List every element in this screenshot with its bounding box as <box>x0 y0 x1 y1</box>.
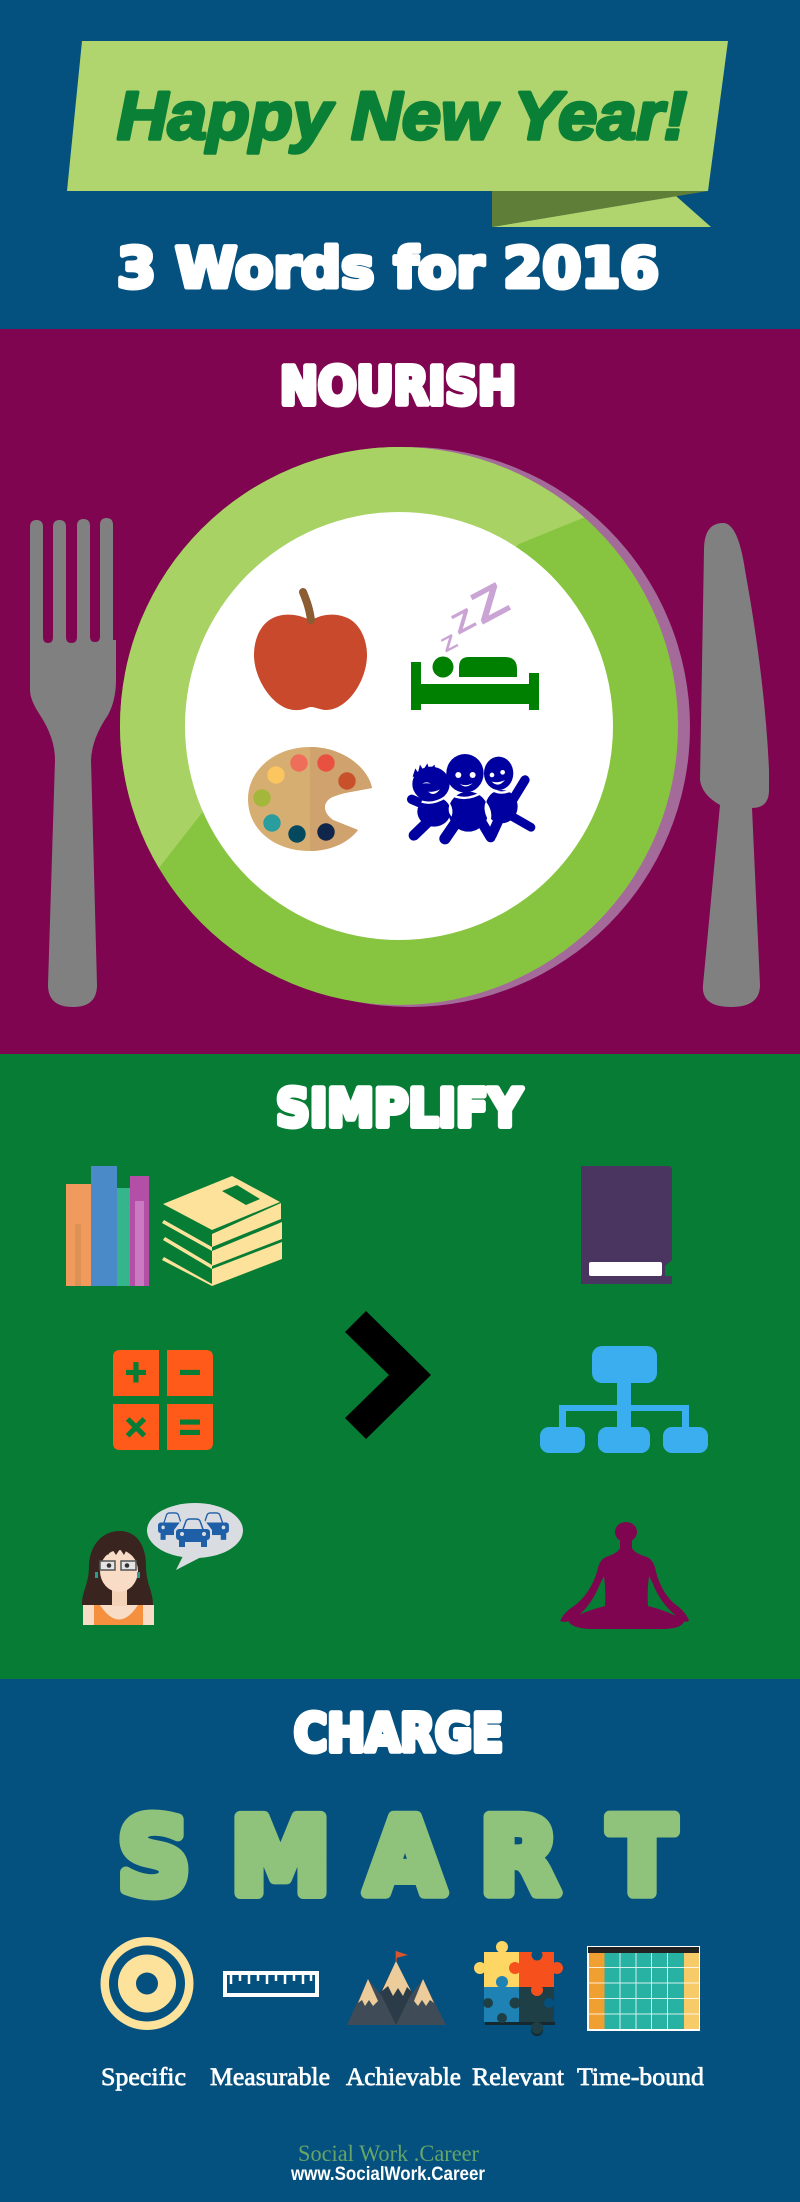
icon: puzzle <box>474 1941 563 2036</box>
smart acronym <box>118 1796 675 1918</box>
icon: sleeping in bed: Z <box>437 630 461 657</box>
icon: apple <box>254 592 367 710</box>
icon: org chart <box>540 1346 708 1453</box>
smart acronym: A <box>366 1796 444 1918</box>
label: specific: Specific <box>101 2064 186 2091</box>
icon: woman thinking about traffic <box>82 1503 243 1625</box>
icon: calendar <box>587 1946 700 2031</box>
panel: charge <box>0 1679 800 2202</box>
speech bubble with cars <box>147 1503 243 1570</box>
label: achievable: Achievable <box>346 2064 461 2091</box>
footer brand: Social Work .Career <box>298 2141 479 2166</box>
icon: stack of books <box>162 1176 282 1286</box>
icon: calculator: × <box>125 1407 147 1449</box>
icon: book shelf <box>66 1166 149 1286</box>
icon: sleeping in bed: Z <box>462 573 518 635</box>
heading: charge: CHARGE <box>294 1704 503 1764</box>
panel: header <box>0 0 800 329</box>
icon: paint palette <box>248 747 372 851</box>
arrow: greater-than chevron <box>345 1311 431 1439</box>
icon: single book <box>581 1166 672 1284</box>
label: time-bound: Time-bound <box>577 2064 705 2091</box>
plate <box>100 430 690 1007</box>
icon: target <box>100 1937 194 2030</box>
icon: fork <box>30 518 116 1007</box>
smart acronym: T <box>609 1796 675 1918</box>
panel: simplify <box>0 1054 800 1679</box>
icon: sleeping in bed: Z <box>446 601 481 640</box>
smart acronym: M <box>231 1796 330 1918</box>
label: relevant: Relevant <box>472 2064 564 2091</box>
icon: calculator <box>113 1350 213 1450</box>
heading: simplify: SIMPLIFY <box>276 1079 523 1139</box>
icon: sleeping in bed <box>411 573 539 710</box>
icon: calculator: = <box>179 1407 201 1449</box>
smart acronym: R <box>480 1796 559 1918</box>
label: measurable: Measurable <box>210 2064 330 2091</box>
panel: nourish <box>0 329 800 1054</box>
ribbon banner <box>67 41 728 227</box>
title: Happy New Year! <box>117 78 687 154</box>
footer url: www.SocialWork.Career <box>290 2164 486 2185</box>
icon: three friends <box>412 754 531 839</box>
icon: meditating figure <box>560 1522 689 1629</box>
icon: calculator: + <box>125 1352 147 1394</box>
subtitle: 3 Words for 2016 <box>117 236 659 300</box>
heading: nourish: NOURISH <box>280 357 516 417</box>
icon: mountains with flag <box>347 1951 446 2025</box>
icon: calculator: − <box>179 1352 201 1394</box>
icon: knife <box>700 523 769 1007</box>
icon: ruler <box>225 1973 317 1995</box>
smart acronym: S <box>118 1796 190 1918</box>
